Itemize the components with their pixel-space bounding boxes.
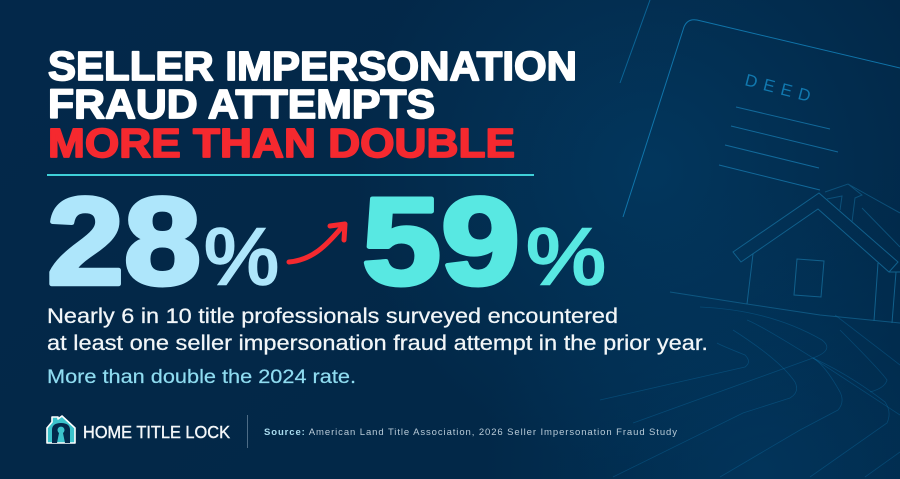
background illustration: deed document xyxy=(620,0,900,217)
title xyxy=(48,43,577,166)
description text xyxy=(47,305,708,355)
statistic: 59 percent: % xyxy=(526,212,606,301)
statistic: 59 percent: 59 xyxy=(362,173,520,311)
title divider xyxy=(47,174,534,176)
arrow: increase xyxy=(289,224,345,262)
description text: at least one seller impersonation fraud attempt in the prior year. xyxy=(47,332,708,355)
background illustration: house outline xyxy=(670,184,900,323)
background illustration: contour lines xyxy=(600,307,900,477)
footer divider xyxy=(247,415,248,448)
title: SELLER IMPERSONATION xyxy=(48,43,577,89)
title: MORE THAN DOUBLE xyxy=(48,120,515,166)
statistic: 28 percent: 28 xyxy=(47,173,201,311)
highlight text: More than double the 2024 rate. xyxy=(47,367,356,388)
logo wordmark: HOME TITLE LOCK xyxy=(83,422,230,442)
icon: house keyhole xyxy=(47,416,75,443)
statistic: 59 percent xyxy=(362,173,606,311)
statistic: 28 percent: % xyxy=(204,212,279,301)
title: FRAUD ATTEMPTS xyxy=(48,81,435,127)
deed label: DEED xyxy=(743,70,817,107)
description text: Nearly 6 in 10 title professionals surveyed encountered xyxy=(47,305,618,328)
statistic: 28 percent xyxy=(47,173,279,311)
source citation: Source: American Land Title Association, 2026 Seller Impersonation Fraud Study xyxy=(264,427,677,438)
logo xyxy=(47,416,230,443)
